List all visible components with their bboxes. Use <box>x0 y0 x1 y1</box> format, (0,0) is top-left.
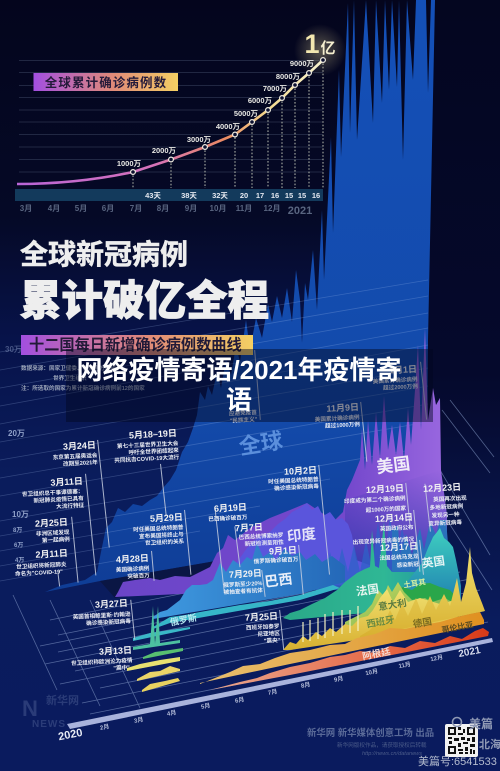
annotation: 3月24日 <box>52 440 109 550</box>
dotted drop lines <box>133 60 323 188</box>
credit block: 新华网 新华媒体创意工场 出品 <box>307 727 434 738</box>
chart: Spain curve <box>127 589 458 671</box>
label: 全球累计确诊病例数 <box>34 73 178 91</box>
QR code <box>445 724 478 757</box>
watermark: Xinhua NEWS logo: 新华网 <box>46 693 79 707</box>
annotation: 12月23日: 英国再次出现 <box>433 494 467 503</box>
month labels <box>20 204 312 217</box>
time axis 2020 to 2021: 2月 <box>99 723 110 732</box>
chart: Italy curve <box>345 582 456 634</box>
annotation: 11月9日: 11月9日 <box>326 402 359 414</box>
annotation: 3月27日: 3月27日 <box>95 598 128 610</box>
grid lines <box>0 280 428 581</box>
annotation: 6月19日 <box>208 502 252 594</box>
axis value labels: 4万 <box>15 557 24 564</box>
month labels: 3月 <box>20 204 32 213</box>
annotation: 7月29日: 俄罗斯至少20% <box>223 579 263 589</box>
top chart grid <box>19 60 323 172</box>
interval bar: 16 <box>312 191 320 200</box>
watermark: Xinhua NEWS logo: N <box>22 696 38 721</box>
curve markers <box>131 58 325 174</box>
annotation: 4月28日: 美国确诊病例 <box>116 564 150 574</box>
curve value labels: 5000万 <box>234 109 258 118</box>
month labels: 5月 <box>75 204 87 213</box>
month labels: 9月 <box>185 204 197 213</box>
annotation: 3月11日: 新冠肺炎疫情已具有 <box>33 494 84 505</box>
annotation: 2月11日: 世卫组织将新冠肺炎 <box>16 560 67 571</box>
annotation: 4月28日: 突破百万 <box>127 571 150 580</box>
annotation: 12月14日 <box>351 510 420 575</box>
annotation: 3月27日: 确诊感染新冠病毒 <box>86 617 131 627</box>
annotation: 3月13日: 3月13日 <box>99 645 132 657</box>
annotation: 3月11日: 3月11日 <box>50 476 83 488</box>
app watermark: 美篇 <box>469 716 493 731</box>
annotation: 4月28日 <box>115 551 154 583</box>
annotation: 9月1日: 9月1日 <box>269 545 297 557</box>
chart: France curve <box>283 522 452 620</box>
annotation: 3月24日: 改期至2021年 <box>63 458 98 468</box>
credit block: http://news.cn/datanews <box>362 751 422 757</box>
annotation: 7月7日 <box>235 521 285 567</box>
source note: 世界卫生组织 <box>53 374 87 382</box>
annotation: 3月27日: 英国首相鲍里斯·约翰逊 <box>73 610 131 621</box>
annotation: 10月2日 <box>267 465 329 577</box>
annotation: vaccine note: "民族主义" <box>229 415 258 424</box>
country labels: 德国 <box>412 615 433 631</box>
axis value labels: 10万 <box>12 510 29 519</box>
time axis 2020 to 2021: 11月 <box>398 661 411 670</box>
time axis 2020 to 2021: 2020 <box>57 727 84 743</box>
annotation: 4月28日: 4月28日 <box>116 553 149 565</box>
interval bar: 16 <box>271 191 279 200</box>
curve value labels: 3000万 <box>187 135 211 144</box>
annotation: 12月19日: 12月19日 <box>366 483 404 495</box>
interval bar: 17 <box>256 191 264 200</box>
source note <box>21 364 145 392</box>
time axis 2020 to 2021 <box>57 638 493 743</box>
annotation: 1月1日: 超过2000万例 <box>383 382 418 392</box>
country labels <box>169 428 474 663</box>
chart: Germany curve <box>137 547 485 681</box>
annotation: 7月25日: 7月25日 <box>245 611 278 623</box>
annotation: 6月19日: 6月19日 <box>214 502 247 514</box>
country labels: 西班牙 <box>365 614 396 630</box>
annotation: 12月14日: 出现变异新冠病毒的情况 <box>352 535 415 546</box>
annotation: 6月19日: 巴西确诊破百万 <box>208 513 248 523</box>
country labels: 土耳其 <box>403 576 427 590</box>
axis value labels <box>5 345 29 564</box>
annotation: 3月13日: 世卫组织称欧洲沦为疫情 <box>71 656 133 667</box>
annotation: 5月29日: 世卫组织的关系 <box>145 537 185 547</box>
annotation: 12月23日 <box>423 482 469 532</box>
time axis 2020 to 2021: 2021 <box>458 645 482 660</box>
country labels: 俄罗斯 <box>169 612 198 628</box>
axis value labels: 8万 <box>13 527 22 534</box>
annotation: 7月29日 <box>223 568 265 599</box>
annotation: 7月7日: 7月7日 <box>235 522 263 533</box>
annotation: 11月9日: 超过1000万例 <box>325 420 360 430</box>
axis value labels: 6万 <box>14 542 23 549</box>
annotation: 2月25日: 第一起病例 <box>42 535 70 544</box>
annotation: 1月1日 <box>372 362 427 422</box>
annotation: 9月1日 <box>253 545 303 597</box>
app watermark: 美篇号:6541533 <box>418 754 497 768</box>
axis value labels: 30万 <box>5 345 22 354</box>
interval bar: 15 <box>298 191 306 200</box>
country labels: 法国 <box>355 582 380 599</box>
month labels: 2021 <box>288 205 312 217</box>
interval bar: 43天 <box>145 191 161 200</box>
month labels: 7月 <box>130 204 142 213</box>
annotation: 3月11日: 大流行特征 <box>56 501 85 510</box>
country labels: 印度 <box>286 524 317 546</box>
curve value labels: 2000万 <box>152 146 176 155</box>
annotation: 12月17日: 感染新冠 <box>396 560 419 569</box>
annotation: 5月18-19日 <box>113 428 183 518</box>
source note: 数据来源：国家卫健委、各国官方渠道 <box>21 364 117 372</box>
interval bar: 20 <box>240 191 248 200</box>
chart: Argentina curve <box>210 628 489 690</box>
chart: Brazil curve <box>153 543 345 619</box>
label: 全球累计确诊病例数: 全球累计确诊病例数 <box>45 75 167 90</box>
source note: 注：所选取的国家为累计新冠确诊病例前12的国家 <box>21 384 145 392</box>
annotation: 7月7日: 巴西总统博索纳罗 <box>238 531 284 541</box>
annotation: 2月25日 <box>35 517 78 585</box>
annotation: 5月29日: 宣布美国将终止与 <box>139 530 184 540</box>
curve value labels: 9000万 <box>290 59 314 68</box>
time axis 2020 to 2021: 7月 <box>267 688 278 697</box>
time axis 2020 to 2021: 9月 <box>333 675 344 684</box>
annotation: 2月11日: 2月11日 <box>35 548 68 560</box>
credit block: 新华网版权作品，请获取授权后转载 <box>337 741 427 749</box>
time axis 2020 to 2021: 5月 <box>200 702 211 711</box>
curve value labels: 6000万 <box>248 96 272 105</box>
annotation: 12月23日: 变异新冠病毒 <box>428 518 463 528</box>
annotation: 5月18-19日: 第七十三届世界卫生大会 <box>117 439 179 450</box>
annotation: 7月7日: 新冠检测呈阳性 <box>244 538 284 548</box>
annotation: 7月25日 <box>245 610 284 652</box>
axis value labels: 20万 <box>8 429 25 438</box>
annotation: 7月25日: 西班牙加泰罗 <box>246 622 280 632</box>
annotation: 12月19日: 印度成为第二个确诊病例 <box>344 494 406 505</box>
time axis 2020 to 2021: 10月 <box>365 668 379 677</box>
annotation: 3月11日: 世卫组织总干事谭德塞： <box>22 487 84 498</box>
annotation: 3月27日 <box>72 598 135 643</box>
chart: United Kingdom curve <box>392 520 461 604</box>
title line 1: 全球新冠病例 <box>20 239 188 270</box>
annotation: 10月2日: 确诊感染新冠病毒 <box>274 482 319 492</box>
time axis 2020 to 2021: 3月 <box>133 716 144 725</box>
1亿 label: 亿 <box>320 40 336 57</box>
1亿 label: 1 <box>304 29 320 59</box>
label: 十二国每日新增确诊病例数曲线: 十二国每日新增确诊病例数曲线 <box>29 336 242 354</box>
country labels: 阿根廷 <box>361 645 392 663</box>
watermark: Xinhua NEWS logo: NEWS <box>32 719 66 730</box>
month labels: 10月 <box>210 204 226 213</box>
curve value labels: 7000万 <box>263 84 287 93</box>
dark band below the global curve <box>100 555 240 598</box>
country labels: 全球 <box>237 428 285 459</box>
annotation: vaccine note: 应避免疫苗 <box>229 408 257 417</box>
country labels: 美国 <box>375 453 411 477</box>
annotation: 5月29日: 5月29日 <box>150 512 183 524</box>
annotation: 12月19日 <box>343 483 410 528</box>
annotation: 1月1日: 美国累计确诊病例 <box>373 375 418 385</box>
annotation: 12月17日: 法国总统马克龙 <box>379 552 419 562</box>
time axis 2020 to 2021: 12月 <box>430 654 444 663</box>
chart: global daily new cases silhouette <box>45 0 435 592</box>
annotation: 2月25日: 非洲区域发现 <box>36 528 70 538</box>
annotation: 5月29日 <box>132 510 191 578</box>
annotation: 2月11日 <box>14 548 70 589</box>
chart: United States curve <box>115 328 447 597</box>
month labels: 11月 <box>236 204 252 213</box>
country labels: 哥伦比亚 <box>441 619 474 635</box>
annotation: 5月18-19日: 5月18–19日 <box>129 428 177 441</box>
annotation: 7月25日: "震央" <box>264 636 281 645</box>
annotation: vaccine note <box>226 350 260 424</box>
month labels: 6月 <box>102 204 114 213</box>
annotation: 12月17日 <box>379 540 423 577</box>
app watermark <box>418 716 500 768</box>
annotation: 12月23日: 多地新冠病例 <box>429 502 464 512</box>
annotation: 12月17日: 12月17日 <box>380 541 418 553</box>
cumulative curve <box>17 60 323 184</box>
annotation: 5月29日: 时任美国总统特朗普 <box>133 523 184 534</box>
country labels: 巴西 <box>264 570 293 590</box>
annotation: 12月14日: 英国政府公布 <box>380 523 414 533</box>
annotation: 7月29日: 7月29日 <box>229 568 262 580</box>
month labels: 12月 <box>264 204 280 213</box>
annotation: 7月25日: 尼亚地区 <box>257 629 280 638</box>
annotation: 12月23日: 12月23日 <box>423 482 461 494</box>
annotation: 12月19日: 超1000万的国家 <box>365 504 407 514</box>
curve value labels: 8000万 <box>276 72 300 81</box>
credit block <box>307 727 434 757</box>
perspective floor lines <box>13 400 494 714</box>
month labels: 8月 <box>157 204 169 213</box>
chart: India curve <box>235 503 410 590</box>
annotation: 12月14日: 12月14日 <box>375 512 413 524</box>
top chart: cumulative cases <box>15 24 346 217</box>
annotation: 3月13日: "震中" <box>113 663 130 672</box>
annotation: 10月2日: 时任美国总统特朗普 <box>268 475 319 486</box>
small early waves of the European curves <box>133 606 190 659</box>
annotation: 10月2日: 10月2日 <box>284 465 317 477</box>
Spain comb spikes <box>303 606 358 642</box>
annotation: 5月18-19日: 呼吁全世界团结起来 <box>128 446 179 457</box>
annotation: 3月13日 <box>70 645 133 674</box>
time axis 2020 to 2021: 8月 <box>300 681 311 690</box>
overlay banner title: 网络疫情寄语/2021年疫情寄语 <box>76 355 402 415</box>
annotation: 3月24日: 东京第五届奥运会 <box>53 451 98 461</box>
annotation: 12月23日: 发现另一种 <box>431 510 460 520</box>
watermark: Xinhua NEWS logo <box>22 693 79 730</box>
annotation: 5月18-19日: 共同抗击COVID-19大流行 <box>114 453 180 464</box>
country labels: 英国 <box>421 554 446 571</box>
curve value labels: 1000万 <box>117 159 141 168</box>
chart: Turkey curve <box>385 583 458 620</box>
chart: Colombia curve <box>142 612 484 692</box>
right side dark backdrop <box>428 0 500 620</box>
interval bar: 32天 <box>212 191 228 200</box>
interval bar: 15 <box>285 191 293 200</box>
annotation: 1月1日: 1月1日 <box>389 364 417 375</box>
time axis 2020 to 2021: 4月 <box>166 709 177 718</box>
1亿 label <box>304 29 336 59</box>
glow behind 1亿 <box>294 24 346 76</box>
annotation: 9月1日: 俄罗斯确诊破百万 <box>253 555 299 565</box>
chart: Russia curve <box>153 585 340 629</box>
country labels: 意大利 <box>378 597 408 613</box>
annotation: 2月25日: 2月25日 <box>35 517 68 529</box>
curve value labels <box>117 59 314 168</box>
annotation: 3月24日: 3月24日 <box>63 440 96 452</box>
month labels: 4月 <box>48 204 60 213</box>
annotation: 3月11日 <box>21 474 96 579</box>
annotation: 7月29日: 被抽查者有抗体 <box>223 586 263 596</box>
annotation: 11月9日: 美国累计确诊病例 <box>315 413 360 423</box>
interval bar: 38天 <box>181 191 197 200</box>
annotation: 2月11日: 命名为"COVID-19" <box>15 567 63 578</box>
curve value labels: 4000万 <box>216 122 240 131</box>
title line 2: 累计破亿全程 <box>20 277 269 324</box>
time axis 2020 to 2021: 6月 <box>234 696 245 705</box>
interval bar <box>15 189 323 201</box>
annotation: 11月9日 <box>314 402 367 464</box>
